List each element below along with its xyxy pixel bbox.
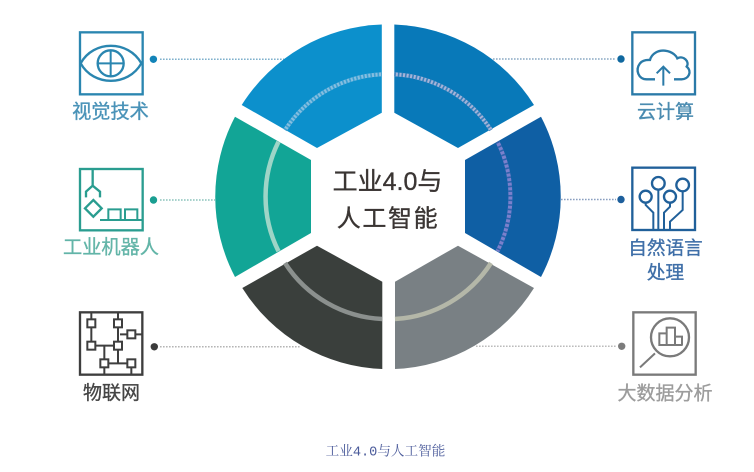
item: cloud computing bbox=[617, 32, 695, 123]
dot bbox=[617, 196, 625, 203]
segment: vision technology bbox=[242, 24, 382, 148]
item: natural language processing bbox=[617, 168, 703, 283]
dot bbox=[151, 343, 158, 350]
label: 物联网 bbox=[83, 382, 140, 404]
center title bbox=[333, 168, 442, 232]
icon: circuit bbox=[632, 168, 695, 230]
item: vision technology bbox=[72, 32, 157, 123]
icon: network bbox=[80, 312, 142, 375]
icon: cloud upload bbox=[632, 32, 695, 94]
item: internet of things bbox=[80, 312, 158, 404]
item: industrial robots bbox=[63, 169, 159, 258]
dot bbox=[617, 55, 625, 63]
connector lines bbox=[160, 59, 616, 347]
label bbox=[628, 238, 703, 283]
segment: natural language processing bbox=[465, 117, 561, 277]
label: 云计算 bbox=[637, 101, 694, 123]
dot bbox=[150, 196, 157, 204]
label: 自然语言 bbox=[628, 238, 703, 258]
caption: 工业4.0与人工智能 bbox=[326, 442, 445, 460]
label: 工业机器人 bbox=[63, 236, 159, 258]
dot bbox=[618, 343, 625, 350]
center title: 人工智能 bbox=[337, 206, 439, 232]
segment: cloud computing bbox=[394, 24, 534, 148]
icon: magnifier with bars bbox=[633, 312, 696, 375]
segment: big data analytics bbox=[395, 246, 534, 369]
item: big data analytics bbox=[617, 312, 713, 404]
label: 处理 bbox=[647, 262, 684, 283]
dot bbox=[150, 56, 157, 63]
icon: eye bbox=[80, 32, 143, 94]
segmented ring chart bbox=[215, 24, 561, 369]
label: 大数据分析 bbox=[617, 382, 713, 404]
segment: internet of things bbox=[242, 246, 382, 369]
label: 视觉技术 bbox=[72, 101, 149, 123]
segment: industrial robots bbox=[215, 117, 311, 277]
center title: 工业4.0与 bbox=[333, 168, 442, 196]
icon: robot arm bbox=[80, 169, 143, 230]
